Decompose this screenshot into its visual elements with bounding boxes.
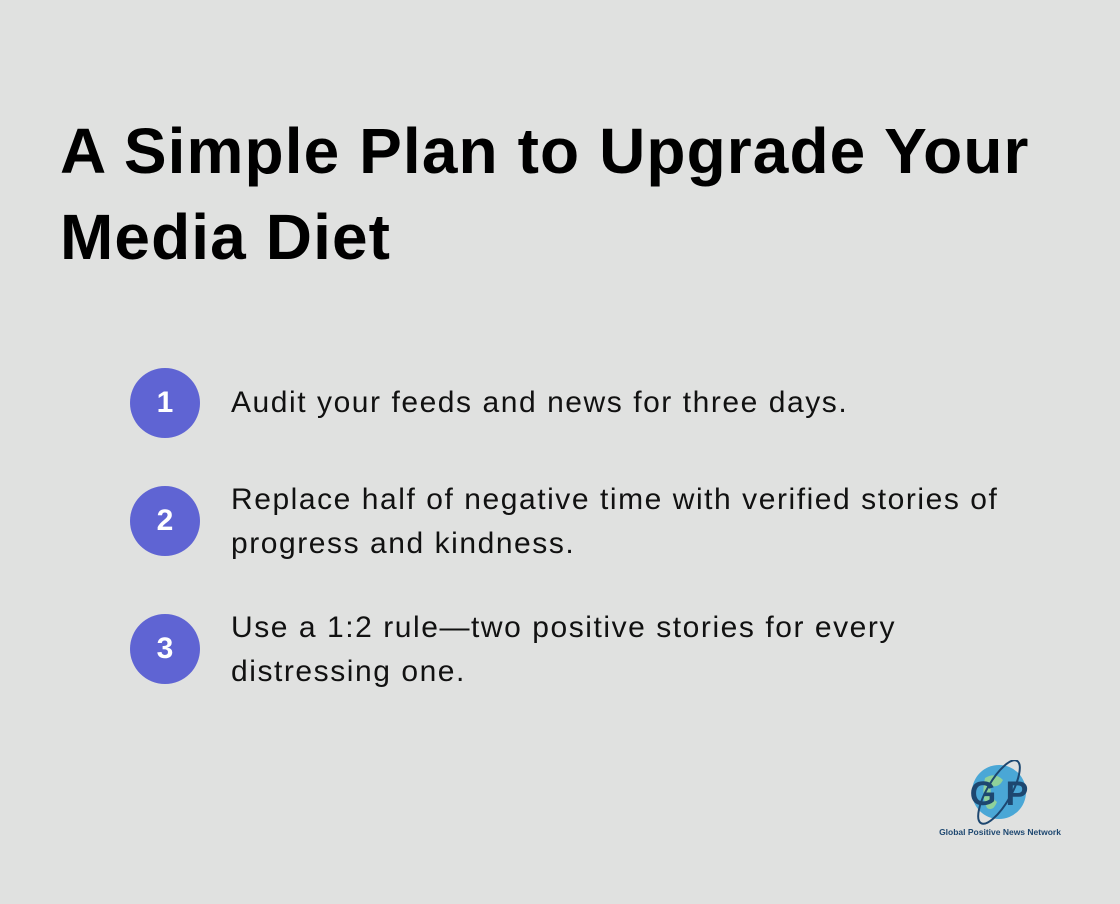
step 3 text xyxy=(231,611,896,688)
step 3 text: Use a 1:2 rule—two positive stories for every xyxy=(231,611,896,644)
title xyxy=(60,115,1030,273)
step 3 xyxy=(130,611,896,688)
badge 3 xyxy=(130,614,200,684)
logo: Global Positive News Network xyxy=(939,827,1061,837)
step 1 text: Audit your feeds and news for three days. xyxy=(231,386,848,419)
logo xyxy=(939,760,1061,837)
step 3 text: distressing one. xyxy=(231,655,466,688)
badge 2: 2 xyxy=(157,504,173,537)
step 2 text: Replace half of negative time with verified stories of xyxy=(231,483,998,516)
title: Media Diet xyxy=(60,201,391,273)
badge 3: 3 xyxy=(157,632,173,665)
title: A Simple Plan to Upgrade Your xyxy=(60,115,1030,187)
badge 1 xyxy=(130,368,200,438)
step 2 xyxy=(130,483,998,560)
badge 2 xyxy=(130,486,200,556)
step 1 xyxy=(130,368,848,438)
badge 1: 1 xyxy=(157,386,173,419)
step 2 text: progress and kindness. xyxy=(231,527,575,560)
step 2 text xyxy=(231,483,998,560)
logo: G P xyxy=(970,775,1028,813)
